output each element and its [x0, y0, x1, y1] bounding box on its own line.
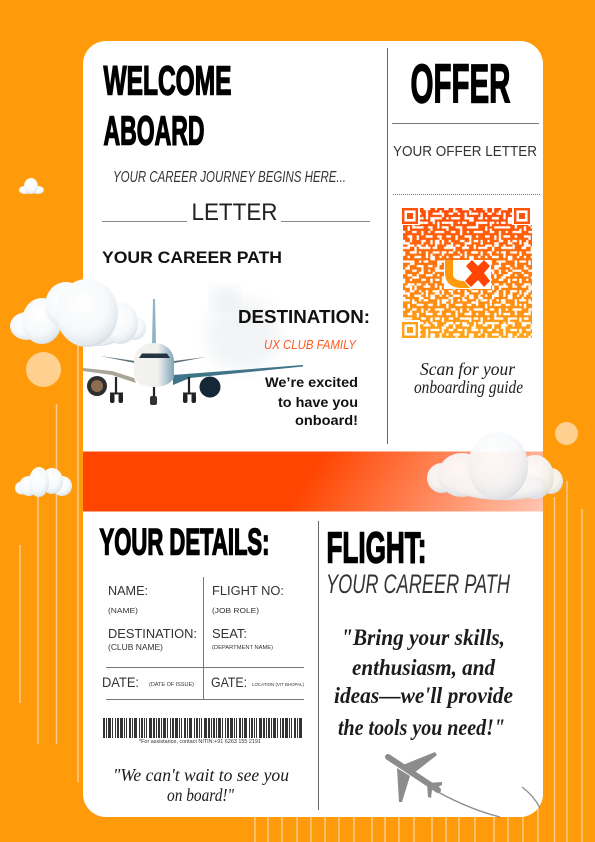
- details table: FLIGHT NO:: [212, 583, 284, 598]
- destination block: to have you: [278, 394, 358, 410]
- details table: DESTINATION:: [108, 626, 197, 641]
- quote: [334, 625, 513, 740]
- heading: offer: OFFER: [410, 52, 510, 114]
- illustration: airplane: [83, 286, 303, 405]
- title: welcome aboard: [104, 58, 232, 154]
- details table: (JOB ROLE): [212, 608, 259, 615]
- dotted divider: [393, 194, 540, 196]
- details table: [102, 577, 304, 700]
- subheading: your career path: YOUR CAREER PATH: [326, 569, 510, 599]
- heading: your career path: YOUR CAREER PATH: [102, 249, 282, 267]
- tagline: YOUR CAREER JOURNEY BEGINS HERE...: [113, 169, 346, 186]
- details table: (DEPARTMENT NAME): [212, 645, 273, 651]
- cloud: small upper left: [19, 178, 44, 194]
- icon: grey plane with trail: [388, 752, 540, 817]
- destination block: We’re excited: [265, 374, 358, 390]
- scan caption: onboarding guide: [414, 377, 523, 397]
- barcode: *For assistance, contact NITIN:+91 6263 155 2191: [139, 739, 261, 745]
- qr code: [401, 206, 532, 338]
- background streak lines: [20, 345, 582, 842]
- destination block: UX CLUB FAMILY: [264, 337, 357, 352]
- closing note: "We can't wait to see you: [113, 765, 289, 785]
- destination block: DESTINATION:: [238, 306, 370, 327]
- title: welcome aboard: ABOARD: [104, 108, 204, 154]
- heading: your details: YOUR DETAILS:: [100, 522, 270, 562]
- orange gradient band: [83, 452, 543, 512]
- decorative circle left: [26, 352, 61, 387]
- quote: "Bring your skills,: [341, 625, 505, 650]
- title: welcome aboard: WELCOME: [104, 58, 232, 104]
- quote: ideas—we'll provide: [334, 683, 513, 708]
- cloud: large left: [10, 279, 146, 347]
- heading: flight: FLIGHT:: [326, 524, 426, 572]
- closing note: on board!": [167, 785, 234, 805]
- scan caption: Scan for your: [420, 359, 516, 379]
- letter heading: LETTER: [192, 199, 278, 226]
- destination block: [238, 306, 370, 428]
- ticket card: [83, 41, 543, 817]
- cloud: right over band: [427, 432, 563, 500]
- destination block: onboard!: [295, 412, 358, 428]
- details table: (NAME): [108, 608, 138, 615]
- details table: NAME:: [108, 583, 148, 598]
- details table: (CLUB NAME): [108, 643, 163, 652]
- details table: DATE:: [102, 674, 139, 690]
- details table: LOCATION (VIT BHOPAL): [252, 682, 304, 687]
- details table: SEAT:: [212, 626, 247, 641]
- text: your offer letter: YOUR OFFER LETTER: [393, 143, 537, 160]
- quote: the tools you need!": [338, 715, 505, 740]
- details table: (DATE OF ISSUE): [149, 682, 194, 688]
- decorative circle right: [555, 422, 578, 445]
- cloud: small mid left: [15, 467, 72, 497]
- dividers: [318, 48, 388, 810]
- scan caption: [414, 359, 523, 397]
- quote: enthusiasm, and: [352, 655, 495, 680]
- details table: GATE:: [211, 674, 247, 690]
- closing note: [113, 765, 289, 805]
- rule under offer: [392, 122, 539, 124]
